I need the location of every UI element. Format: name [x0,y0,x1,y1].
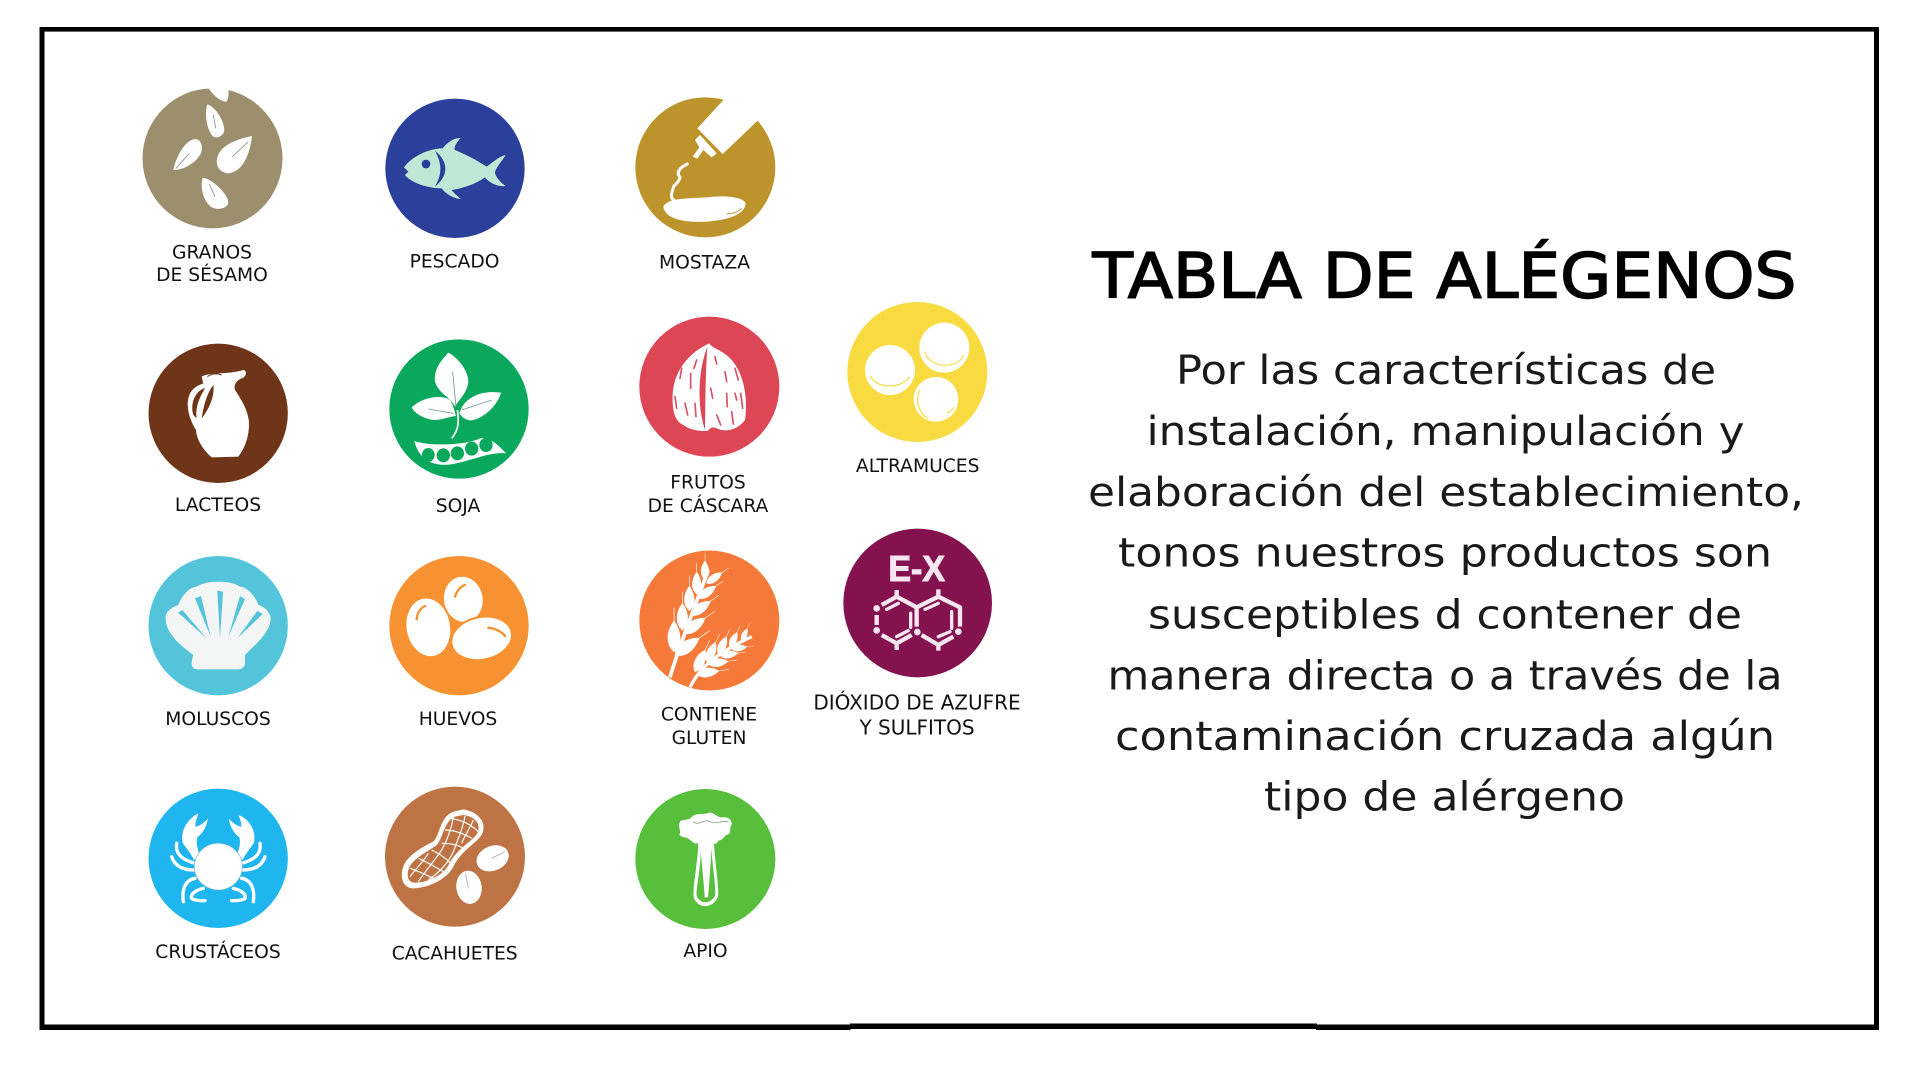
allergen: tree nuts [639,317,779,517]
icon: celery [635,789,775,929]
allergen: fish [385,99,525,272]
label: soy: SOJA [436,496,480,517]
label: eggs: HUEVOS [419,709,497,730]
text block: description: susceptibles d contener de [1148,592,1742,638]
allergen: molluscs [148,556,288,730]
allergen: celery [635,789,775,962]
allergen: soy [389,339,529,517]
text block: description: tonos nuestros productos son [1118,531,1772,577]
label: dairy: LACTEOS [175,495,261,516]
icon: walnut [639,317,779,457]
label: sulphites: DIÓXIDO DE AZUFRE [813,690,1021,714]
allergen: mustard [635,80,780,274]
text block: description: Por las características de [1176,348,1716,394]
label: sulphites: Y SULFITOS [858,716,975,740]
label: celery: APIO [683,941,728,962]
text block: description: manera directa o a través de la [1108,653,1782,699]
text block: description: instalación, manipulación y [1146,409,1744,455]
label: mustard: MOSTAZA [659,252,750,274]
icon: peanut [385,787,525,927]
label: crustaceans: CRUSTÁCEOS [155,940,281,963]
icon: wheat [639,550,779,690]
icon: fish [385,99,525,238]
label: sesame: DE SÉSAMO [156,263,268,286]
allergen: lupins [847,302,987,477]
text block: description [1088,348,1804,821]
label: fish: PESCADO [410,252,499,272]
icon: jug [148,344,288,483]
label: molluscs: MOLUSCOS [165,709,271,730]
icon: E-X molecule: E-X [888,548,945,589]
icon: mustard bottle [635,80,780,237]
text block: description: tipo de alérgeno [1264,775,1625,821]
icon: lupin beans [847,302,987,442]
text block: description: elaboración del establecimiento, [1088,470,1804,516]
allergen: dairy [148,344,288,516]
label: tree nuts: FRUTOS [670,472,746,494]
allergen: sesame [142,88,282,286]
panel: allergen grid [142,80,1021,964]
label: lupins: ALTRAMUCES [856,456,979,477]
allergen: crustaceans [148,789,288,963]
label: gluten: GLUTEN [672,728,746,749]
icon: shell [148,556,288,695]
allergen: eggs [389,556,529,730]
label: sesame: GRANOS [172,242,252,264]
icon: crab [148,789,288,928]
text block: description: contaminación cruzada algún [1115,714,1775,760]
icon: eggs [389,556,529,695]
icon: soy plant [389,339,529,479]
allergen: peanuts [385,787,525,964]
label: gluten: CONTIENE [661,704,757,726]
icon: sesame seeds [142,88,282,228]
label: peanuts: CACAHUETES [392,944,518,964]
label: tree nuts: DE CÁSCARA [648,494,769,517]
allergen: gluten [639,550,779,749]
title: TABLA DE ALÉGENOS [1091,240,1796,313]
icon: E-X molecule [843,529,992,677]
allergen: sulphites [813,529,1021,740]
